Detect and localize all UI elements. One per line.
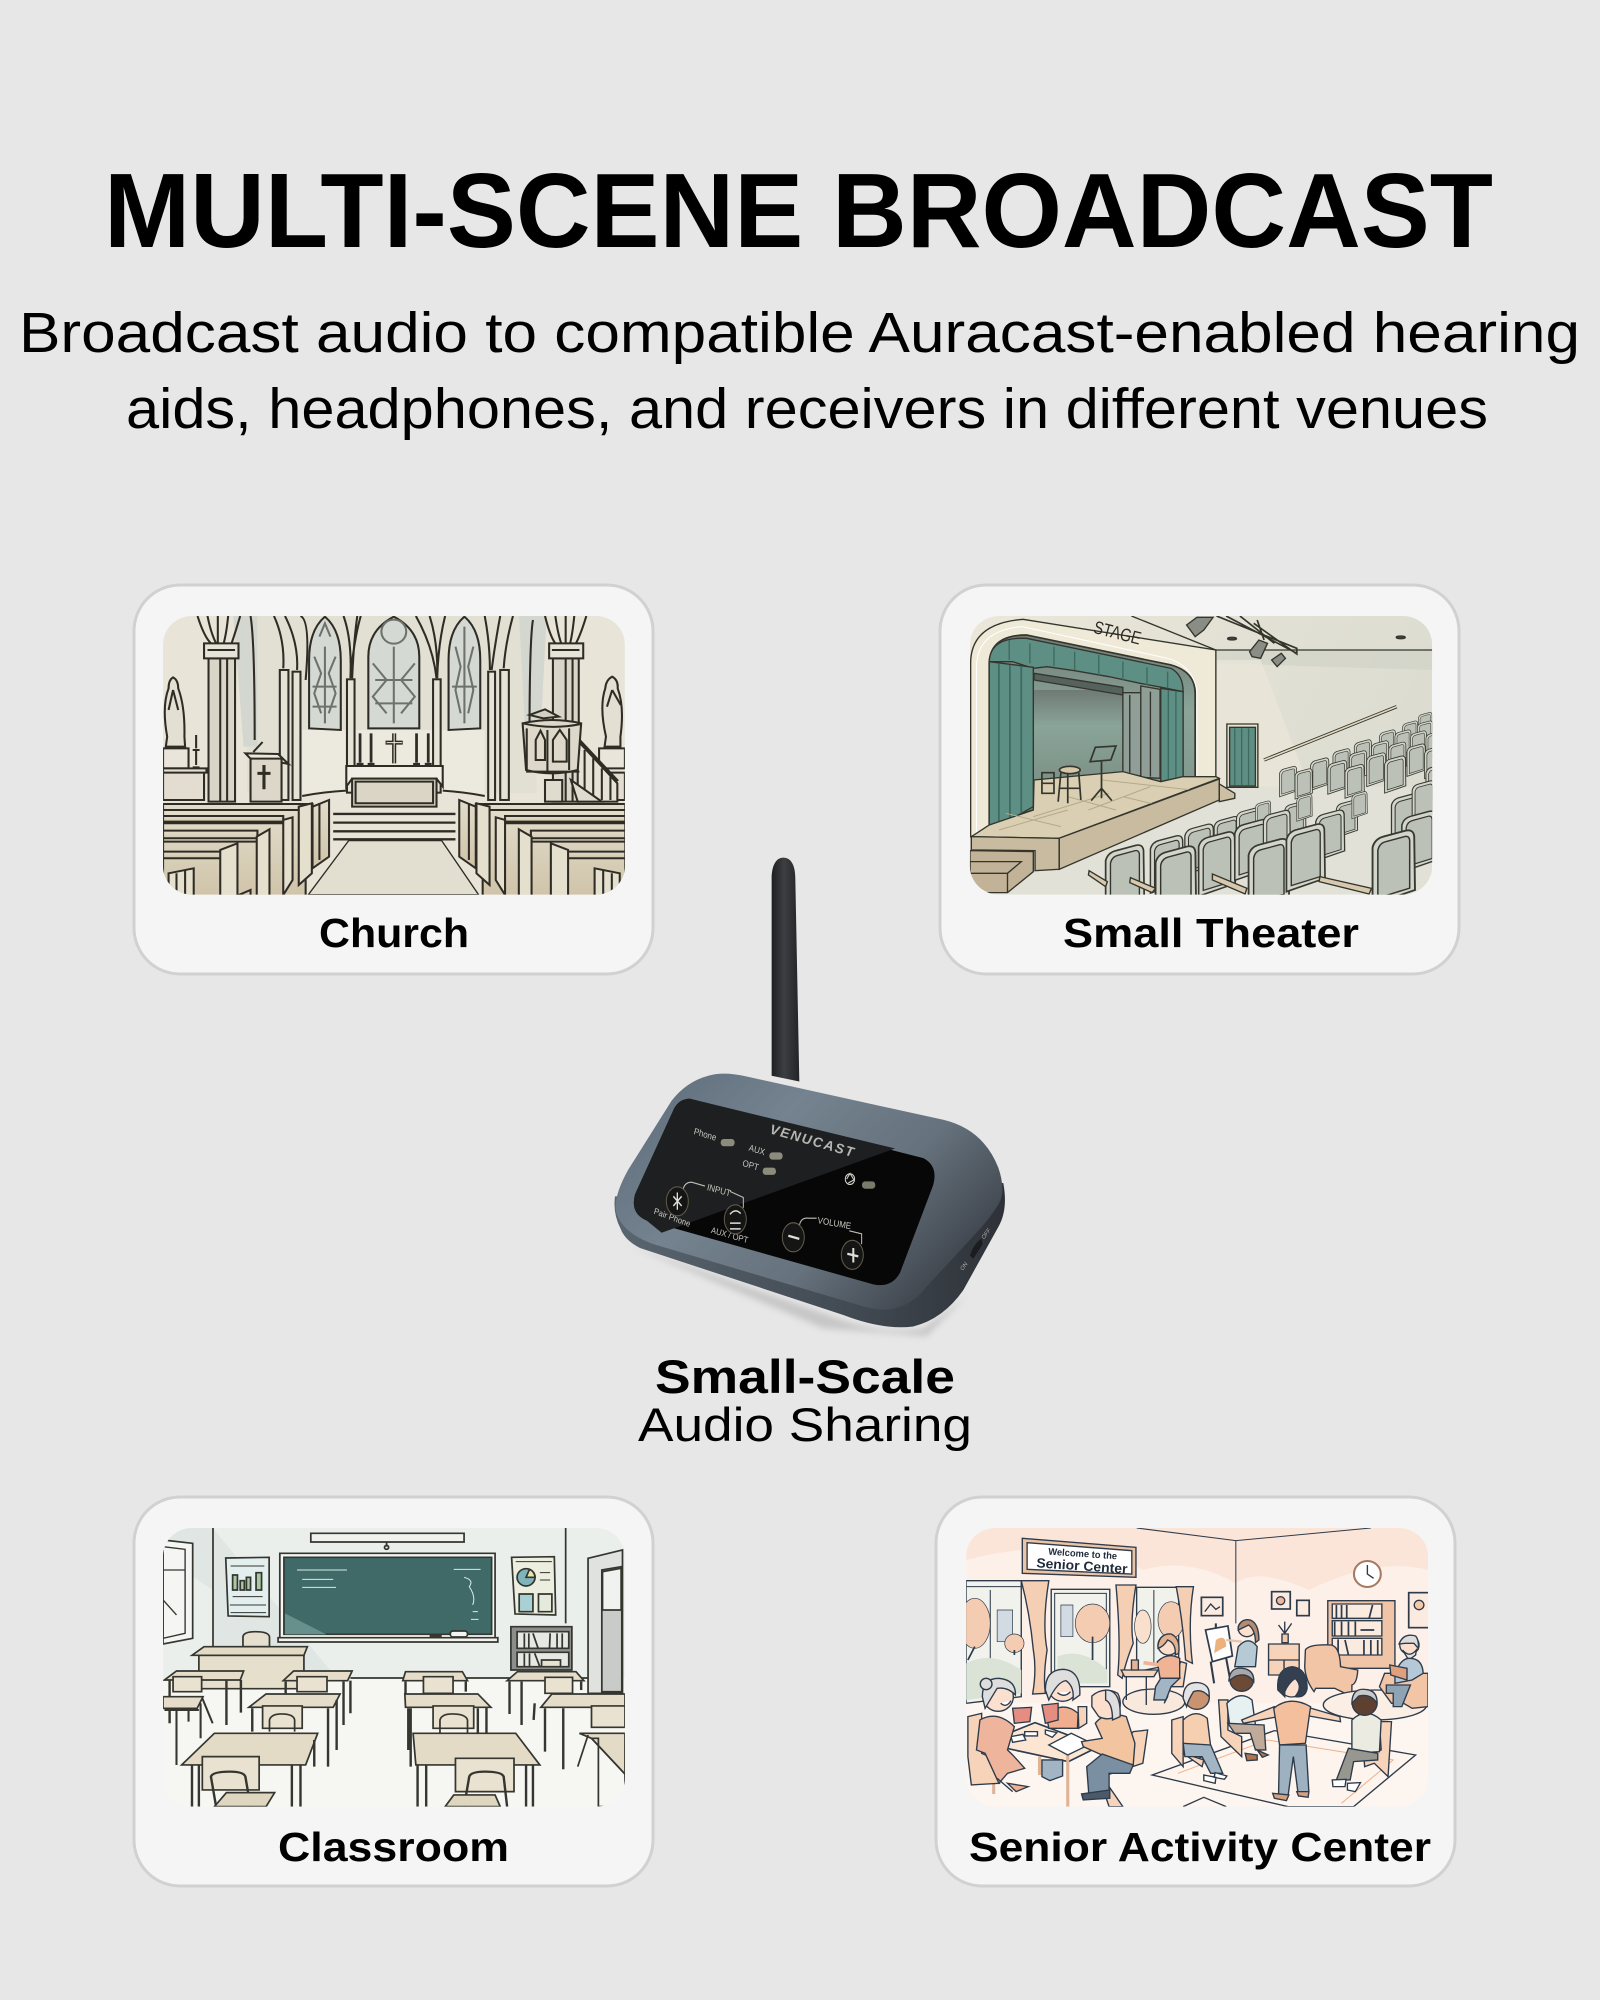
rugs xyxy=(1123,1689,1185,1714)
projector screen xyxy=(311,1533,464,1542)
subtitle xyxy=(19,301,1580,441)
pews left xyxy=(163,800,329,900)
device shadow xyxy=(627,1244,967,1336)
back seats xyxy=(1280,712,1447,801)
label: small theater: Small Theater xyxy=(1063,910,1359,956)
sign xyxy=(1022,1538,1136,1577)
props xyxy=(1042,773,1054,793)
door xyxy=(1227,724,1258,787)
bookshelf xyxy=(511,1627,572,1670)
vault ribs xyxy=(198,616,255,740)
antenna xyxy=(772,858,799,1082)
label: classroom: Classroom xyxy=(278,1824,509,1870)
device side xyxy=(614,1183,1005,1327)
power switch xyxy=(960,1227,993,1272)
label: senior activity center: Senior Activity Center xyxy=(969,1824,1431,1870)
man at table xyxy=(1082,1690,1148,1807)
chalkboard xyxy=(280,1553,495,1638)
left statue xyxy=(165,677,185,747)
seated man exercise xyxy=(1219,1668,1268,1761)
teacher desk xyxy=(243,1632,269,1647)
panel markings: AUX xyxy=(748,1142,766,1157)
desks middle row xyxy=(163,1694,625,1769)
title: MULTI-SCENE BROADCAST xyxy=(104,152,1493,270)
card table xyxy=(983,1723,1099,1762)
power switch: OFF xyxy=(981,1227,993,1241)
right column xyxy=(553,658,579,802)
steps xyxy=(970,851,1033,893)
STAGE sign: STAGE xyxy=(1092,617,1144,649)
armchair xyxy=(1305,1645,1358,1697)
valance xyxy=(989,638,1183,692)
reading man xyxy=(1379,1635,1428,1708)
panel markings xyxy=(653,1121,875,1245)
glass reflection xyxy=(634,1099,895,1233)
label: church: Church xyxy=(319,910,469,956)
window xyxy=(163,1540,193,1644)
product: VenuCast transmitter xyxy=(614,858,1005,1336)
caption: small-scale audio sharing: Audio Sharing xyxy=(638,1398,972,1451)
door xyxy=(588,1550,622,1693)
pie poster xyxy=(512,1557,556,1615)
power switch: ON xyxy=(960,1261,969,1272)
panel brackets xyxy=(683,1182,862,1244)
thin columns xyxy=(280,670,509,800)
panel markings: Phone xyxy=(693,1126,718,1143)
far front rows xyxy=(1150,781,1435,893)
bookshelf xyxy=(1328,1601,1395,1668)
subtitle: Broadcast audio to compatible Auracast-enabled hearing xyxy=(19,301,1580,365)
lectern xyxy=(245,753,288,764)
illustration: theater stage and seating xyxy=(970,616,1432,895)
woman at desk xyxy=(1121,1634,1187,1705)
seated man right xyxy=(1332,1689,1391,1792)
panel markings: VENUCAST xyxy=(769,1121,857,1161)
grey curtains xyxy=(1123,686,1160,778)
illustration: classroom xyxy=(163,1528,625,1807)
right statue xyxy=(602,677,622,747)
subtitle: aids, headphones, and receivers in different venues xyxy=(126,377,1488,441)
painter with easel xyxy=(1206,1620,1259,1683)
desks front row xyxy=(182,1733,625,1807)
button glyphs xyxy=(673,1193,858,1263)
arm rests xyxy=(1088,871,1372,894)
seated woman exercise left xyxy=(1172,1683,1227,1783)
stage front xyxy=(1059,779,1219,869)
panel markings: Pair Phone xyxy=(653,1206,692,1229)
panel: small theater xyxy=(940,585,1459,974)
laughing woman xyxy=(1042,1669,1087,1781)
illustration: senior activity center: Welcome to the xyxy=(1048,1547,1118,1562)
cabinet and vase xyxy=(1269,1644,1299,1675)
front row seats xyxy=(1154,823,1416,895)
proscenium xyxy=(971,619,1216,837)
panel markings: VOLUME xyxy=(817,1215,852,1231)
pews right xyxy=(459,800,625,900)
illustration: senior activity center: Senior Center xyxy=(1036,1556,1129,1576)
lighting truss xyxy=(1217,616,1297,654)
panel buttons xyxy=(666,1187,863,1269)
panel markings: AUX / OPT xyxy=(710,1225,749,1245)
wall art xyxy=(1201,1592,1429,1628)
panel: senior activity center xyxy=(936,1497,1455,1886)
stage opening xyxy=(989,635,1195,825)
caption: small-scale audio sharing: Small-Scale xyxy=(655,1350,955,1403)
clock xyxy=(1354,1561,1381,1587)
hand rail xyxy=(1264,707,1397,760)
stage floor xyxy=(971,772,1219,838)
altar xyxy=(346,766,443,787)
panel: classroom xyxy=(134,1497,653,1886)
glass panel xyxy=(634,1099,935,1285)
aisle xyxy=(308,841,479,895)
chart poster xyxy=(226,1557,269,1617)
panel: church xyxy=(134,585,653,974)
illustration: church interior xyxy=(163,616,625,900)
curtains xyxy=(1021,1581,1193,1694)
device top xyxy=(616,1074,1002,1310)
windows xyxy=(966,1581,1179,1703)
desks back row xyxy=(164,1671,584,1725)
back wall xyxy=(1034,690,1122,718)
panel markings: OPT xyxy=(742,1157,760,1173)
left curtain xyxy=(989,662,1033,825)
illustration: senior activity center xyxy=(959,1528,1429,1807)
panel markings: INPUT xyxy=(706,1182,732,1199)
pairing icon xyxy=(845,1173,855,1184)
right curtain xyxy=(1161,688,1183,782)
left column xyxy=(209,658,235,802)
woman with bun xyxy=(968,1678,1032,1792)
standing woman xyxy=(1242,1667,1341,1801)
middle row seats xyxy=(1088,810,1432,895)
caption: small-scale audio sharing xyxy=(638,1350,972,1451)
pulpit xyxy=(576,754,618,803)
steps xyxy=(333,814,455,839)
windows xyxy=(309,617,480,730)
